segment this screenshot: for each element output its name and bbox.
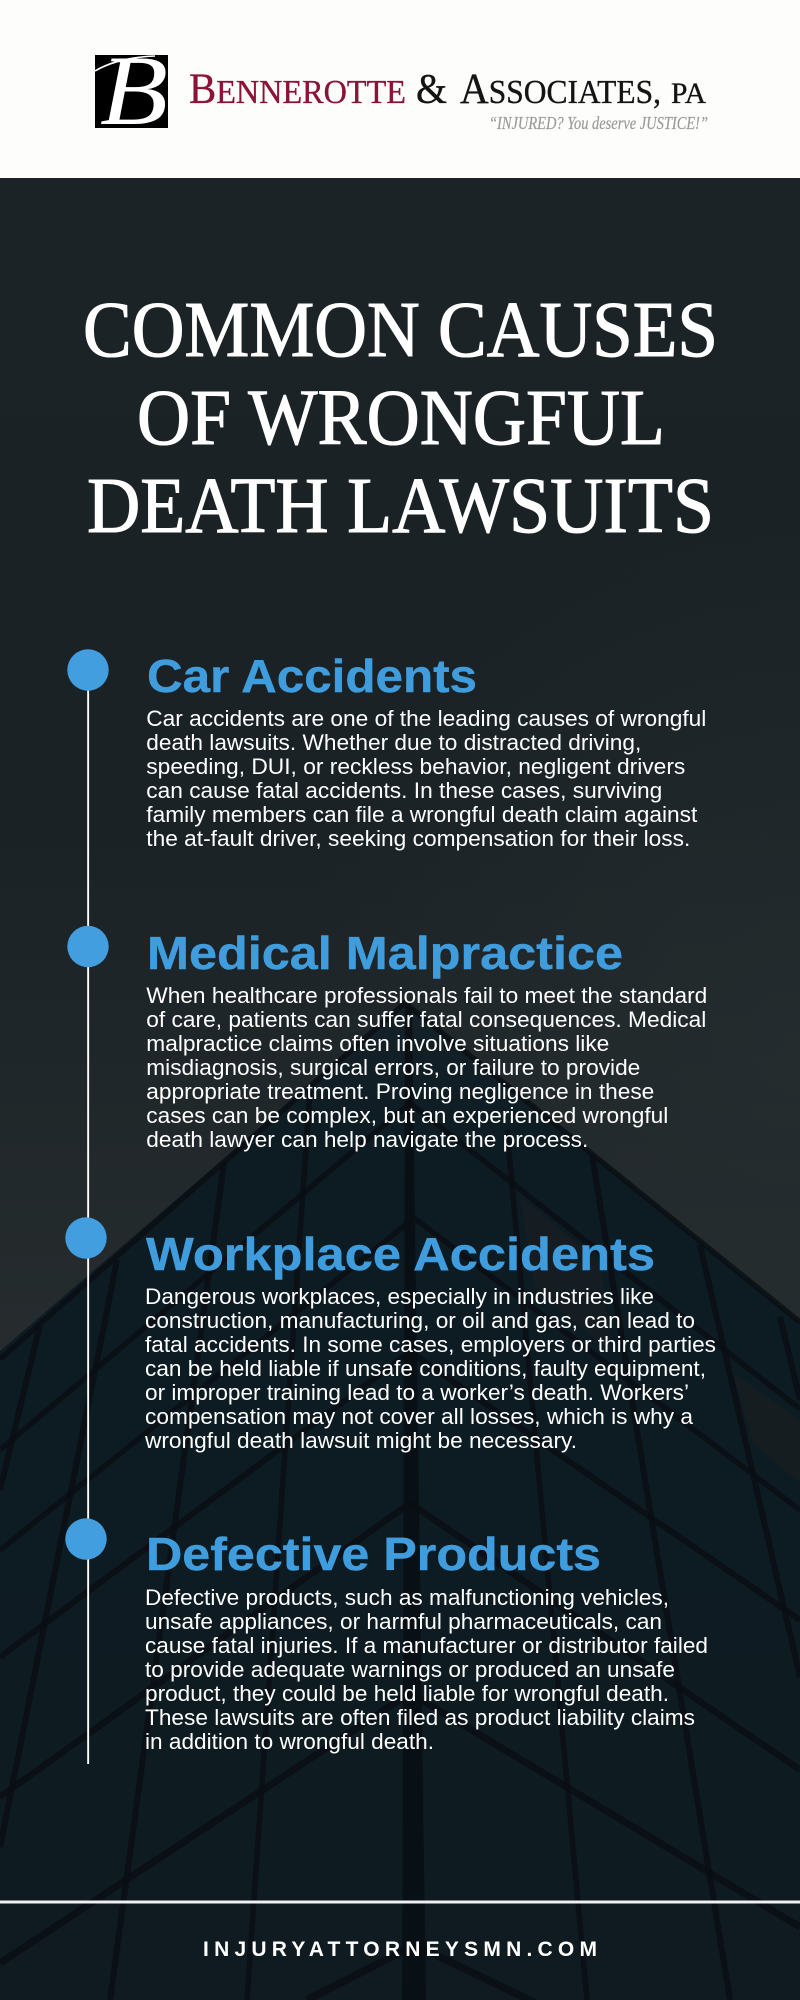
text block: product, they could be held liable for wrongful death. — [145, 1681, 669, 1706]
dot — [65, 1217, 107, 1259]
timeline line — [87, 690, 89, 1764]
text block: or improper training lead to a worker’s death. Workers’ — [145, 1380, 689, 1405]
title: OF WRONGFUL — [137, 375, 665, 462]
panel: medical malpractice — [67, 926, 707, 1152]
title: DEATH LAWSUITS — [87, 463, 714, 550]
heading: Car Accidents — [147, 650, 477, 702]
dot — [65, 1518, 107, 1560]
panel: workplace accidents — [65, 1217, 716, 1453]
text block: construction, manufacturing, or oil and gas, can lead to — [145, 1308, 695, 1333]
text block: death lawyer can help navigate the process. — [146, 1127, 588, 1152]
text block: appropriate treatment. Proving negligence in these — [146, 1079, 654, 1104]
firm name: ASSOCIATES, — [460, 66, 661, 113]
text block: of care, patients can suffer fatal consequences. Medical — [146, 1007, 706, 1032]
text block: unsafe appliances, or harmful pharmaceuticals, can — [145, 1609, 662, 1634]
text block: When healthcare professionals fail to meet the standard — [146, 983, 707, 1008]
panel: car accidents — [67, 649, 706, 851]
text block: Defective products, such as malfunctioning vehicles, — [145, 1585, 669, 1610]
dot — [67, 649, 109, 691]
text block — [145, 1585, 708, 1754]
text block: in addition to wrongful death. — [145, 1729, 434, 1754]
text block — [146, 706, 706, 851]
heading: Medical Malpractice — [147, 927, 623, 979]
text block: fatal accidents. In some cases, employers or third parties — [145, 1332, 716, 1357]
text block — [144, 1284, 716, 1453]
text block: wrongful death lawsuit might be necessary. — [144, 1428, 577, 1453]
firm name: BENNEROTTE — [189, 66, 406, 113]
text block: Car accidents are one of the leading causes of wrongful — [146, 706, 706, 731]
header band — [0, 0, 800, 178]
text block: family members can file a wrongful death claim against — [146, 802, 697, 827]
dot — [67, 926, 109, 967]
icon: monogram emblem: B — [100, 35, 168, 146]
logo — [95, 55, 708, 130]
title: COMMON CAUSES — [83, 287, 718, 374]
text block: misdiagnosis, surgical errors, or failure to provide — [146, 1055, 640, 1080]
firm name — [189, 66, 706, 113]
text block — [146, 983, 707, 1152]
text block: malpractice claims often involve situations like — [146, 1031, 609, 1056]
footer url: INJURYATTORNEYSMN.COM — [203, 1938, 597, 1961]
heading: Workplace Accidents — [146, 1228, 655, 1280]
text block: the at-fault driver, seeking compensation for their loss. — [146, 826, 690, 851]
title — [83, 287, 718, 550]
text block: can cause fatal accidents. In these cases, surviving — [146, 778, 662, 803]
panel: defective products — [65, 1518, 708, 1754]
text block: to provide adequate warnings or produced an unsafe — [145, 1657, 675, 1682]
text block: death lawsuits. Whether due to distracted driving, — [146, 730, 641, 755]
text block: can be held liable if unsafe conditions, faulty equipment, — [145, 1356, 706, 1381]
text block: speeding, DUI, or reckless behavior, negligent drivers — [146, 754, 685, 779]
tagline: “INJURED? You deserve JUSTICE!” — [489, 113, 708, 133]
firm name: PA — [671, 77, 706, 110]
text block: compensation may not cover all losses, which is why a — [145, 1404, 694, 1429]
text block: cases can be complex, but an experienced wrongful — [146, 1103, 668, 1128]
text block: These lawsuits are often filed as product liability claims — [145, 1705, 695, 1730]
heading: Defective Products — [146, 1528, 601, 1580]
icon: monogram emblem — [95, 55, 168, 128]
text block: cause fatal injuries. If a manufacturer or distributor failed — [145, 1633, 708, 1658]
firm name: & — [416, 67, 447, 113]
text block: Dangerous workplaces, especially in industries like — [145, 1284, 654, 1309]
